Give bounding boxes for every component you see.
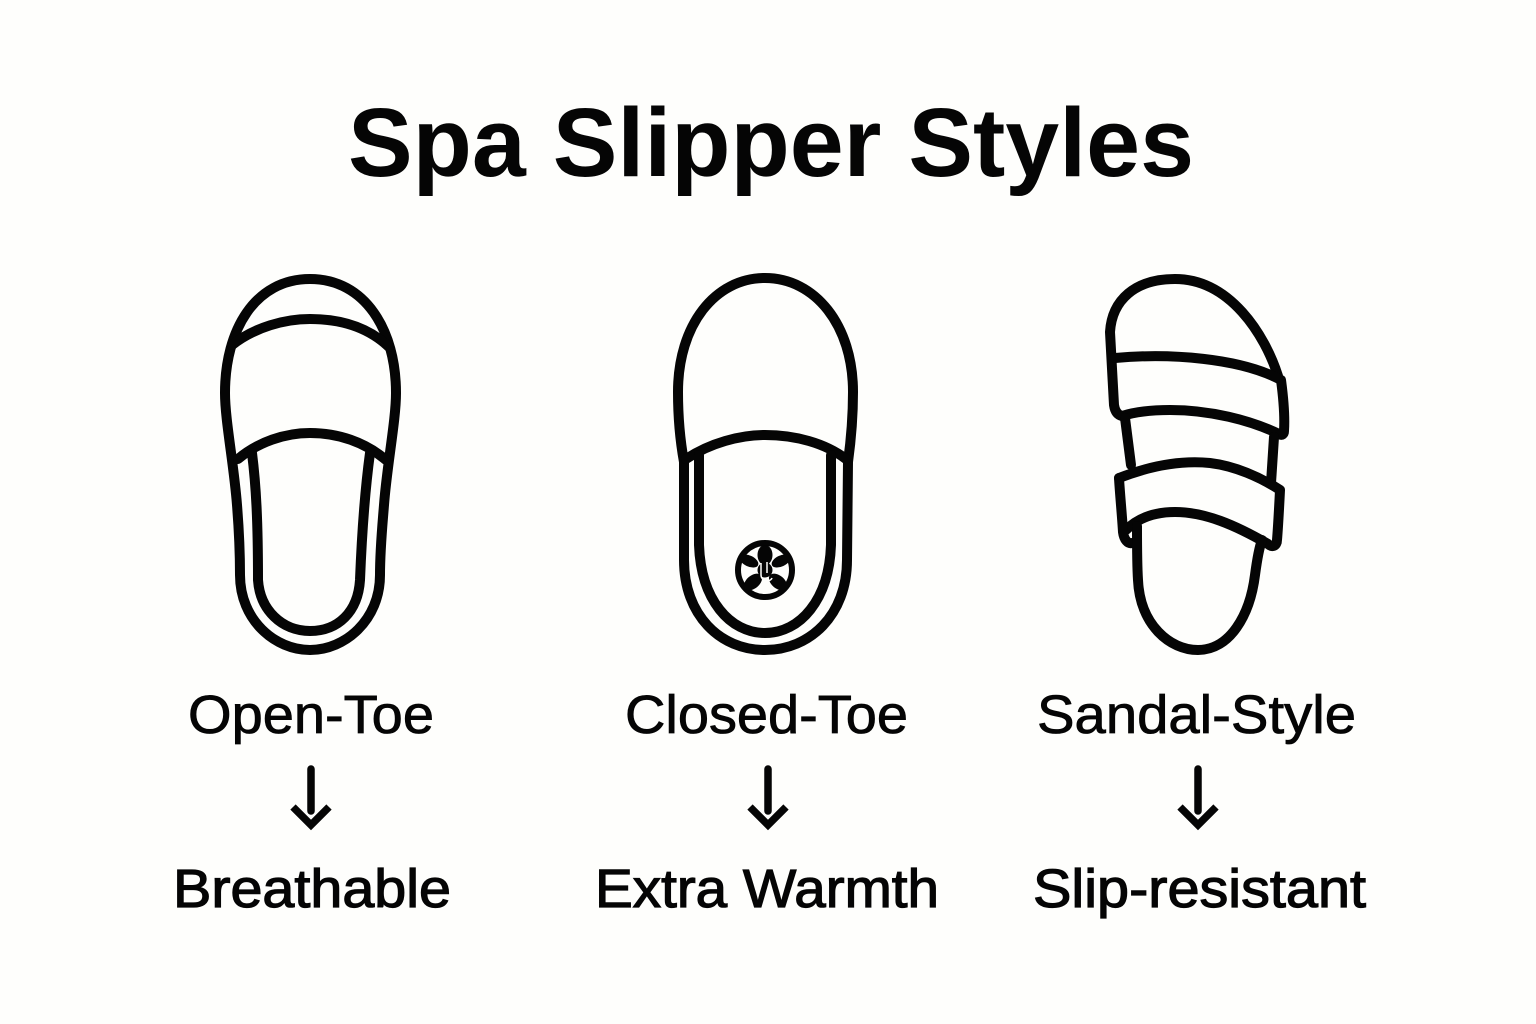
benefit: breathable: Breathable — [173, 859, 451, 919]
benefit: extra warmth: Extra Warmth — [595, 859, 939, 919]
icon: sandal-style slipper — [1110, 279, 1284, 650]
title: Spa Slipper Styles — [348, 88, 1194, 197]
arrow: open-toe to breathable — [293, 769, 329, 825]
arrow: closed-toe to extra warmth — [750, 769, 786, 825]
icon: flower logo — [738, 543, 792, 597]
arrow: sandal-style to slip-resistant — [1180, 769, 1216, 825]
icon: closed-toe slipper — [678, 278, 853, 650]
benefit: slip-resistant: Slip-resistant — [1033, 859, 1366, 919]
label: sandal-style: Sandal-Style — [1037, 685, 1356, 745]
label: open-toe: Open-Toe — [188, 685, 434, 745]
label: closed-toe: Closed-Toe — [625, 685, 908, 745]
icon: open-toe slipper — [225, 279, 396, 650]
